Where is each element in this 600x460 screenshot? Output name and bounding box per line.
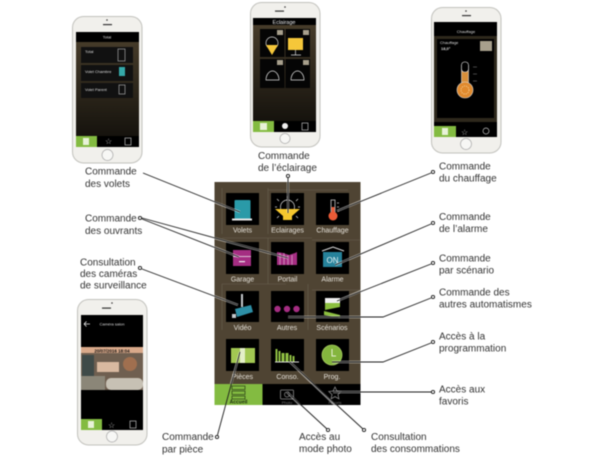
- tile: eclairages: Eclairages: [271, 228, 304, 234]
- label: piece: par pièce: [162, 444, 204, 456]
- tile: volets: Volets: [233, 228, 253, 234]
- phone: camera screen: 20/07/2016 18:04: [94, 348, 130, 354]
- tile: chauffage: [316, 193, 349, 234]
- leader: pieces: [215, 352, 240, 439]
- leader: chauffage: [337, 170, 435, 211]
- label: ouvrants: Commande: [85, 214, 137, 224]
- phone: eclairage screen: Eclairage: [273, 20, 295, 26]
- phone: chauffage screen: ☆: [461, 128, 468, 137]
- label: autres automatismes: autres automatismes: [439, 300, 532, 310]
- tile: portail: Portail: [278, 276, 298, 284]
- label: programmation: Accès à la: [439, 332, 485, 342]
- phone: volets screen: Volet Chambre: [85, 69, 112, 74]
- leader: alarme: [335, 221, 435, 265]
- label: scenario: par scénario: [439, 266, 494, 276]
- phone: volets screen: Volet Parent: [85, 87, 108, 92]
- label: piece: Commande: [162, 432, 214, 443]
- tile: video: Vidéo: [234, 325, 251, 332]
- tile: eclairages: [271, 193, 304, 234]
- label: chauffage: Commande: [439, 162, 491, 172]
- tile: autres: [271, 291, 304, 332]
- tab: accueil: [214, 384, 262, 406]
- label: consommations: des consommations: [371, 444, 460, 455]
- phone: volets screen: [72, 16, 142, 163]
- label: alarme: Commande: [439, 212, 491, 223]
- label: alarme: de l’alarme: [439, 224, 488, 235]
- tile: video: [226, 291, 259, 332]
- label: photo: mode photo: [299, 444, 352, 455]
- tile: volets: [226, 193, 259, 234]
- phone: camera screen: ☆: [108, 421, 115, 430]
- panel: application menu: [214, 182, 360, 384]
- tile: portail: [271, 242, 304, 284]
- leader: eclairage: [286, 174, 290, 213]
- label: cameras: Consultation: [80, 258, 136, 268]
- phone: eclairage screen: [250, 2, 320, 147]
- leader: programmation: [332, 340, 435, 362]
- label: ouvrants: des ouvrants: [85, 226, 142, 237]
- phone: camera screen: [78, 300, 147, 445]
- phone: chauffage screen: [432, 8, 501, 153]
- leader: autres automatismes: [288, 295, 435, 317]
- tile: garage: Garage: [231, 276, 254, 284]
- label: scenario: Commande: [439, 254, 491, 264]
- tab: photo: [280, 390, 294, 405]
- label: eclairage: Commande: [258, 151, 310, 162]
- tile: autres: Autres: [277, 325, 298, 332]
- leader: ouvrants: [138, 216, 288, 258]
- tab: accueil: Accueil: [230, 400, 248, 406]
- tile: conso: Conso.: [276, 374, 299, 381]
- tile: prog: Prog.: [324, 374, 340, 381]
- label: photo: Accès au: [299, 432, 340, 443]
- phone: chauffage screen: 18,0°: [441, 46, 451, 51]
- tile: garage: [226, 242, 259, 284]
- label: cameras: des caméras: [80, 269, 137, 280]
- leader: photo: [287, 392, 330, 432]
- tile: conso: [271, 339, 304, 381]
- label: favoris: Accès aux: [439, 384, 485, 396]
- label: favoris: favoris: [439, 396, 468, 408]
- tab: favoris: [328, 387, 342, 405]
- tile: alarme: ON: [326, 256, 339, 265]
- tile: alarme: [316, 242, 349, 284]
- leader: volets: [143, 173, 240, 212]
- tile: chauffage: Chauffage: [316, 228, 349, 234]
- leader: scenario: [337, 261, 435, 301]
- tab: photo: Photo: [282, 400, 293, 405]
- tile: pieces: [226, 339, 259, 381]
- phone: volets screen: ☆: [105, 137, 112, 146]
- label: volets: des volets: [85, 179, 130, 190]
- tile: alarme: Alarme: [321, 276, 344, 284]
- label: programmation: programmation: [439, 344, 506, 354]
- tile: scenarios: Scénarios: [316, 325, 348, 332]
- leader: cameras: [138, 266, 238, 305]
- leader: favoris: [333, 390, 435, 394]
- leader: consommations: [290, 362, 366, 432]
- phone: chauffage screen: Chauffage: [457, 29, 476, 34]
- label: consommations: Consultation: [371, 432, 427, 443]
- phone: volets screen: Total: [85, 49, 94, 54]
- label: autres automatismes: Commande des: [439, 288, 510, 298]
- label: chauffage: du chauffage: [439, 174, 497, 184]
- label: cameras: de surveillance: [80, 280, 147, 292]
- tab bar: [214, 384, 360, 406]
- tile: pieces: Pièces: [232, 374, 254, 381]
- phone: volets screen: Total: [103, 34, 111, 40]
- tile: prog: [316, 339, 349, 381]
- phone: chauffage screen: Chauffage: [440, 40, 459, 45]
- tab: favoris: Favoris: [328, 400, 342, 405]
- label: volets: Commande: [85, 166, 137, 178]
- tile: scenarios: [316, 291, 349, 332]
- phone: camera screen: Caméra salon: [100, 322, 124, 326]
- label: eclairage: de l’éclairage: [258, 163, 317, 174]
